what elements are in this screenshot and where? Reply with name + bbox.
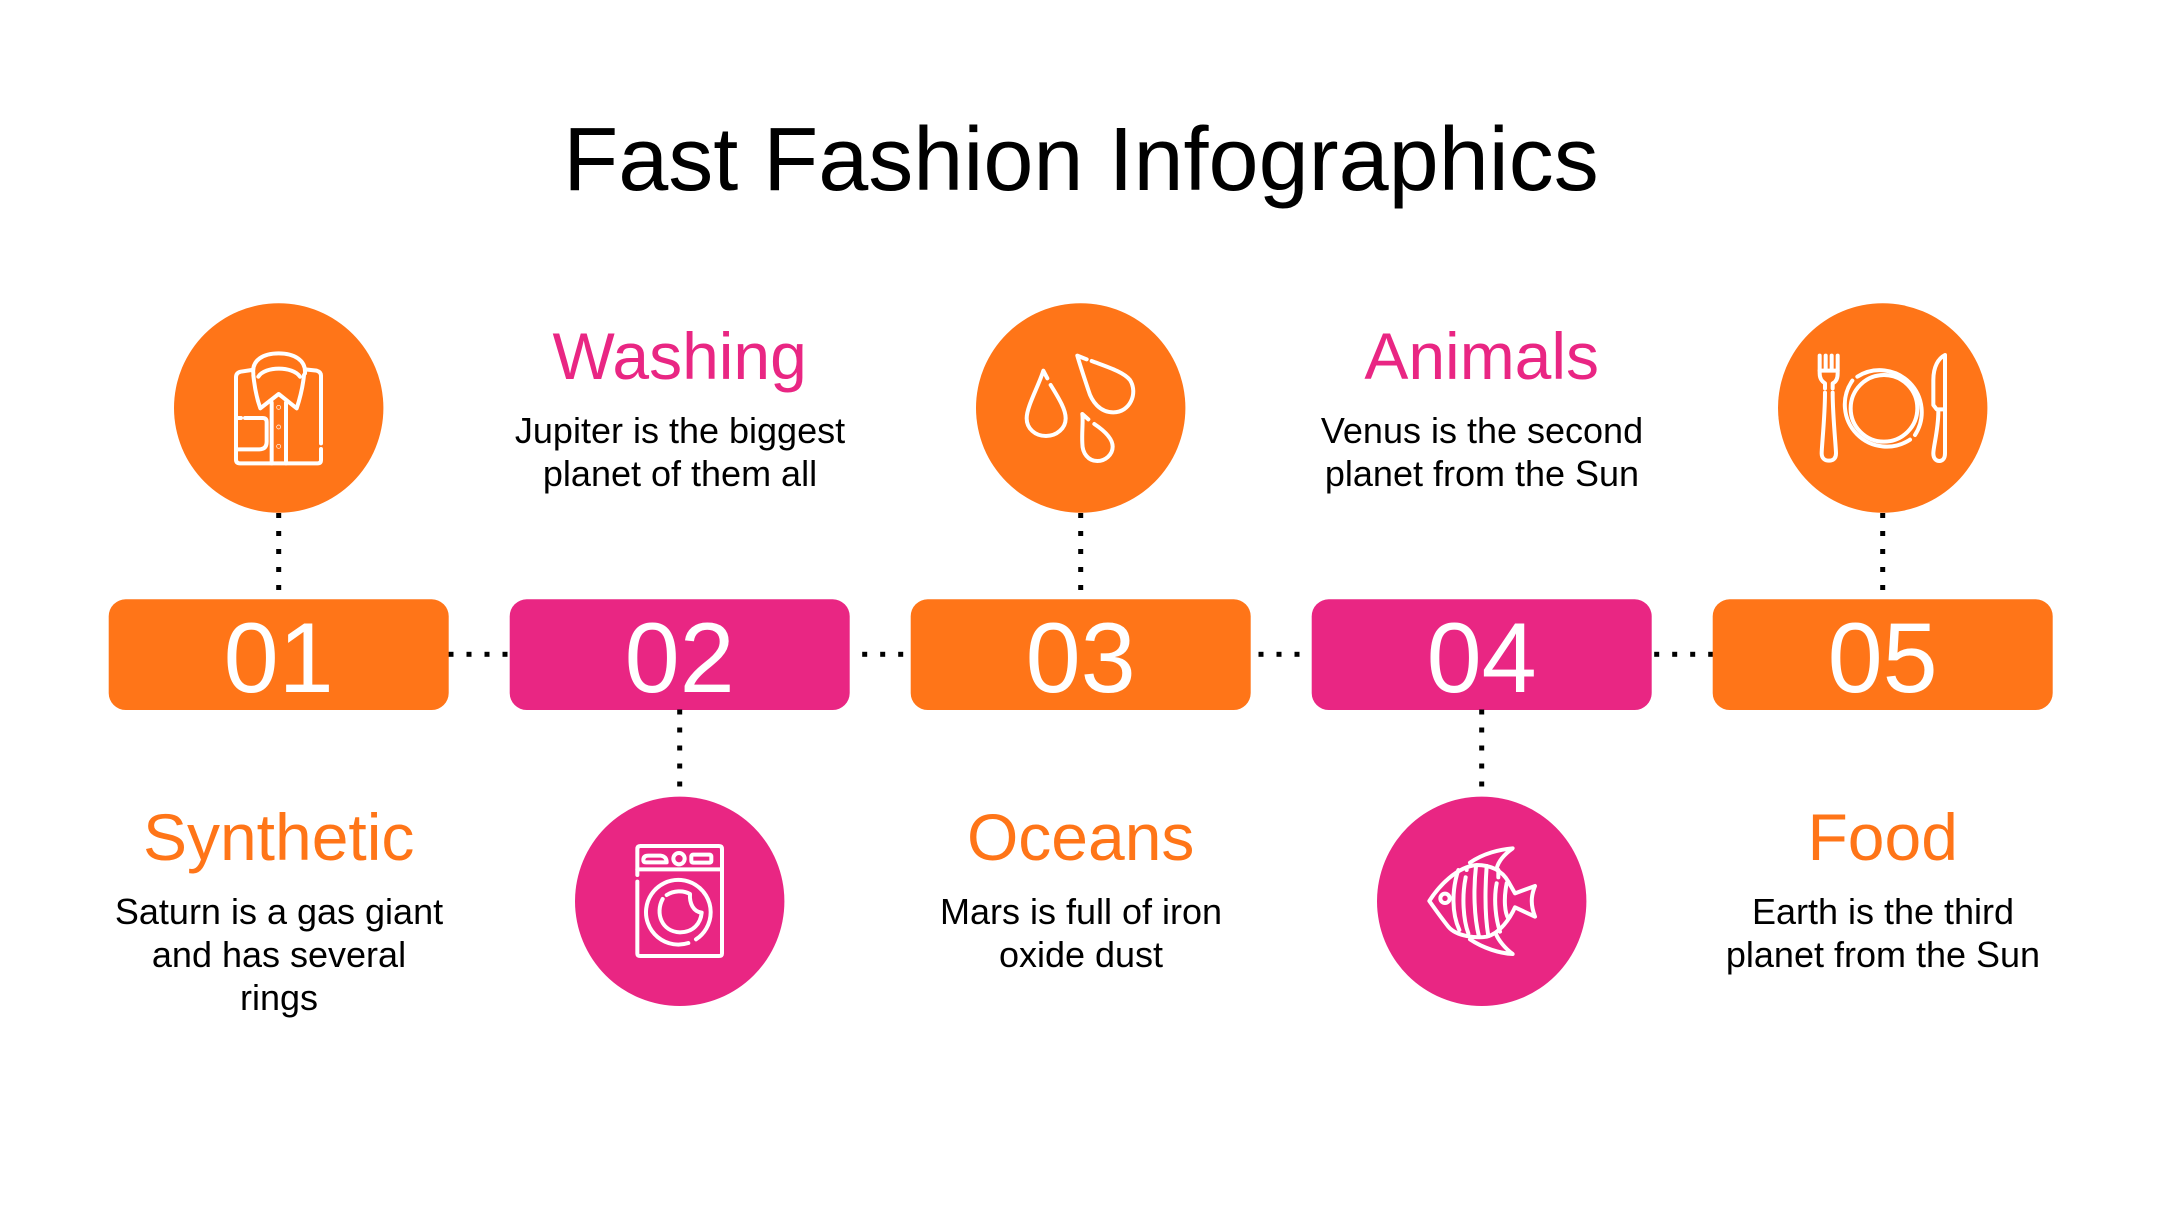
text: animals description: planet from the Sun (1325, 453, 1639, 494)
panel: step 04 animals (1312, 319, 1652, 1006)
heading: oceans: Oceans (967, 800, 1194, 874)
badge 05 (1713, 599, 2053, 713)
circle 01 (174, 303, 383, 513)
connector: 03 to 04 (1258, 652, 1300, 657)
heading: food: Food (1807, 800, 1958, 874)
panel: step 05 food (1713, 303, 2053, 975)
badge 03 (911, 599, 1251, 713)
text: animals description: Venus is the second (1321, 410, 1643, 451)
icon: washing machine (637, 846, 722, 956)
connector: badge to circle 02 (677, 710, 682, 786)
text: oceans description: oxide dust (999, 934, 1163, 975)
badge 03: 03 (1026, 602, 1136, 713)
badge 02 (510, 599, 850, 713)
text: food description: planet from the Sun (1726, 934, 2040, 975)
text: washing description: Jupiter is the biggest (515, 410, 845, 451)
text: washing description: planet of them all (543, 453, 817, 494)
text: food description: Earth is the third (1752, 891, 2014, 932)
connector: 04 to 05 (1654, 652, 1713, 657)
heading: animals: Animals (1364, 319, 1599, 393)
badge 04: 04 (1427, 602, 1537, 713)
icon: water drops (1027, 356, 1133, 461)
icon: shirt (236, 353, 321, 463)
badge 01 (109, 599, 449, 713)
text: synthetic description: Saturn is a gas giant (115, 891, 443, 932)
connector: badge to circle 04 (1479, 710, 1484, 786)
text: synthetic description: rings (240, 977, 318, 1018)
badge 01: 01 (224, 602, 334, 713)
connector: 01 to 02 (448, 652, 508, 657)
icon: fish (1429, 848, 1535, 954)
text: oceans description: Mars is full of iron (940, 891, 1222, 932)
text: synthetic description: and has several (152, 934, 406, 975)
panel: step 01 synthetic (109, 303, 449, 1018)
panel: step 03 oceans (911, 303, 1251, 975)
icon: plate and cutlery (1820, 355, 1945, 461)
heading: synthetic: Synthetic (143, 800, 414, 874)
connector: circle 01 to badge (276, 513, 281, 590)
badge 02: 02 (625, 602, 735, 713)
connector: circle 05 to badge (1880, 513, 1885, 590)
circle 02 (575, 797, 784, 1006)
connector: 02 to 03 (862, 652, 903, 657)
circle 04 (1377, 797, 1586, 1006)
circle 03 (976, 303, 1185, 513)
badge 05: 05 (1828, 602, 1938, 713)
title: Fast Fashion Infographics (563, 110, 1599, 210)
badge 04 (1312, 599, 1652, 713)
connector: circle 03 to badge (1078, 513, 1083, 590)
panel: step 02 washing (510, 319, 850, 1006)
circle 05 (1778, 303, 1987, 513)
heading: washing: Washing (553, 319, 807, 393)
